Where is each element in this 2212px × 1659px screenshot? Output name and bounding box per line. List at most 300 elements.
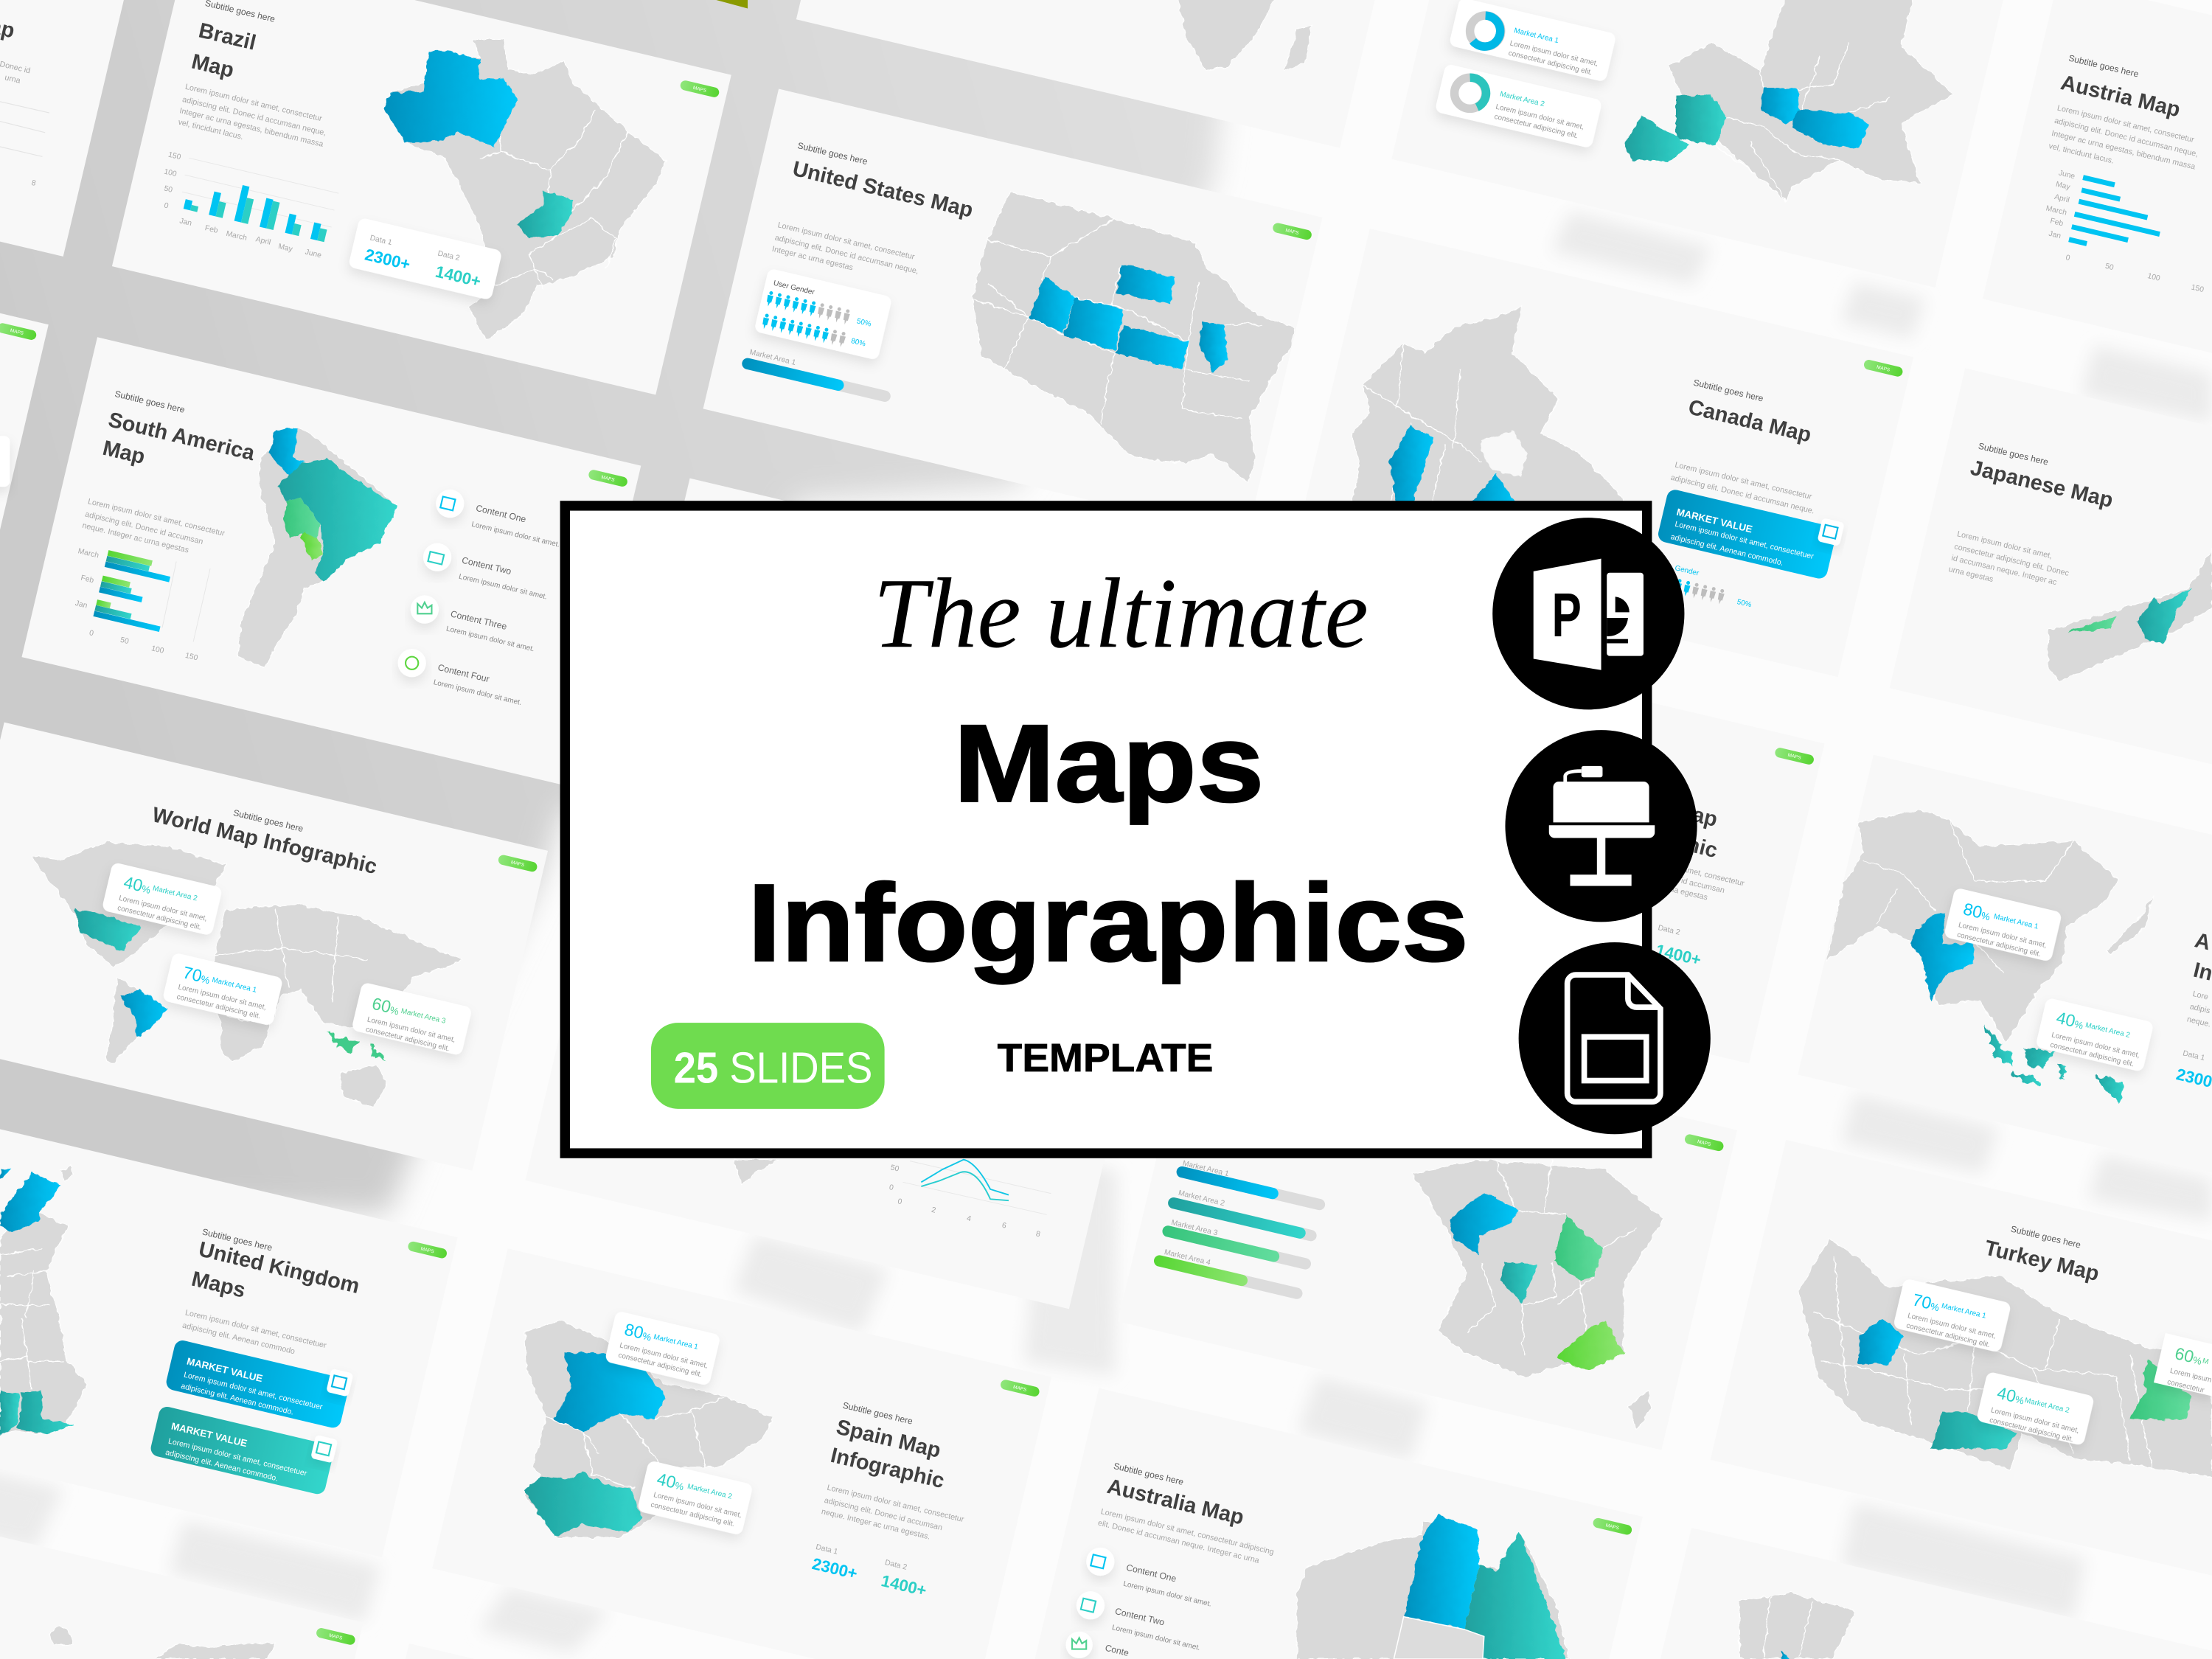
market card one: consectetur adipiscing elit.: [1508, 49, 1593, 77]
body text: adipiscing elit. Donec id accumsan neque,: [2053, 116, 2199, 159]
badge: [1863, 359, 1904, 378]
slide panel: [112, 0, 731, 394]
slide: Canada map: [1294, 229, 1913, 677]
badge: MAPS: [420, 1246, 435, 1255]
body text: Lorem ipsum dolor sit amet, consectetur: [777, 220, 916, 262]
map: Brazil: [383, 40, 666, 340]
subtitle: Subtitle goes here: [1978, 441, 2050, 467]
line chart: 50: [890, 1164, 900, 1174]
region borders: [0, 1248, 63, 1390]
line chart: 4: [966, 1214, 972, 1223]
badge: MAPS: [1876, 365, 1891, 373]
content item three: Lorem ipsum dolor sit amet.: [445, 625, 535, 653]
highlighted province: Alberta: [1390, 426, 1433, 504]
subtitle: Subtitle goes here: [2067, 53, 2140, 80]
body text: [1948, 529, 2070, 587]
title line two: Maps: [189, 1267, 248, 1303]
highlighted: France: [1676, 94, 1727, 145]
data one: Data 1: [815, 1543, 839, 1557]
callout 40%: 40%: [2054, 1008, 2086, 1033]
highlighted: north isles: [0, 1168, 11, 1179]
data card: 1400+: [434, 262, 483, 291]
content item one: [436, 490, 560, 549]
title: Turkey Map: [1982, 1237, 2101, 1286]
country borders: [1716, 42, 1891, 202]
badge: MAPS: [601, 475, 616, 483]
map: Canada: [1352, 306, 1627, 504]
body text: Lorem ipsum dolor sit amet, consectetur: [2056, 103, 2195, 145]
callout 40%: 40%: [122, 872, 153, 897]
body text: elit. Donec id accumsan neque. Integer ac urna: [1097, 1518, 1260, 1565]
content item two: Content Two: [1114, 1606, 1166, 1627]
callout 60%: Lorem ipsum: [2169, 1367, 2212, 1385]
bar chart: May: [277, 243, 294, 254]
slide: Europe map: [1391, 0, 2011, 288]
callout 80%: [605, 1310, 721, 1386]
callout 60%: consectetur: [2166, 1378, 2205, 1395]
content item four: Lorem ipsum dolor sit amet.: [433, 678, 523, 707]
bar chart: [163, 151, 338, 260]
highlighted: Ukraine: [1792, 110, 1869, 148]
callout 40%: Market Area 2: [152, 884, 198, 903]
body text: urna egestas: [1948, 565, 1994, 584]
slide: infographic map fragment: [1206, 615, 1825, 1063]
market card one: [1449, 0, 1616, 83]
highlighted state: Illinois: [1199, 321, 1228, 372]
highlighted state: South Dakota: [1117, 264, 1175, 303]
bar chart: March: [225, 230, 248, 243]
callout 40%: [102, 862, 223, 936]
title: South America: [106, 408, 257, 465]
subtitle: Subtitle goes here: [796, 140, 869, 167]
badge: [316, 1627, 356, 1646]
heading: The ultimate: The ultimate: [873, 558, 1368, 669]
template label: TEMPLATE: [998, 1037, 1213, 1080]
slide panel: [1890, 368, 2212, 765]
callout 60%: [351, 982, 473, 1056]
highlighted state: Utah: [1029, 276, 1075, 333]
map: North America: [32, 842, 226, 967]
horizontal bar chart: [74, 547, 210, 663]
subtitle: Subtitle goes here: [1113, 1461, 1185, 1487]
user gender card: 50%: [856, 317, 872, 329]
icon: PowerPoint: [1492, 518, 1684, 709]
highlighted region: green: [1554, 1214, 1602, 1281]
line chart: 8: [1035, 1230, 1041, 1239]
data label: Data 2: [1657, 924, 1681, 937]
line chart: [888, 1160, 1051, 1239]
bar chart: 150: [167, 151, 182, 161]
region borders: [1764, 1597, 1813, 1658]
body text: Lorem ipsum dolor sit amet, consectetuer: [184, 1308, 327, 1350]
user gender card: [754, 268, 892, 361]
title: Australia Map: [1105, 1475, 1246, 1530]
callout 40%: consectetur adipiscing elit.: [1989, 1416, 2074, 1444]
market value card blue: Lorem ipsum dolor sit amet, consectetuer: [183, 1371, 324, 1412]
callout 80%: Lorem ipsum dolor sit amet,: [619, 1341, 709, 1370]
slide panel: [525, 860, 1144, 1309]
map: Turkey: [1798, 1239, 2212, 1477]
callout 60%: M: [2202, 1357, 2210, 1366]
highlighted state: Kansas: [1114, 326, 1188, 369]
title: Austria Map: [2059, 71, 2183, 122]
callout 60%: [2154, 1333, 2212, 1397]
map: Europe: [1669, 0, 1954, 202]
horizontal bar chart: March: [77, 547, 100, 560]
body text: vel, tincidunt lacus.: [177, 118, 244, 142]
data card: Data 1: [369, 234, 393, 247]
highlighted: Scotland: [0, 1172, 60, 1233]
chart grid: [0, 102, 49, 156]
badge: [588, 469, 628, 487]
highlighted: Queensland: [1464, 1531, 1566, 1659]
title: Brazil: [196, 18, 258, 55]
badge: [0, 322, 38, 341]
slide panel: [1711, 1140, 2212, 1576]
slide panel: [1391, 0, 2011, 288]
slide: hidden centre: [614, 479, 1234, 927]
callout 70%: Lorem ipsum dolor sit amet,: [177, 983, 267, 1012]
body text: neque. Integer ac urna egestas.: [821, 1507, 931, 1542]
highlighted: Northern Territory: [1404, 1515, 1480, 1630]
market value card blue: adipiscing elit. Aenean commodo.: [180, 1382, 294, 1417]
slide panel: [1206, 615, 1825, 1063]
main title card: [565, 506, 1647, 1153]
highlighted state: Amazonas: [383, 51, 518, 147]
bar chart: Jan: [178, 218, 192, 228]
callout 80%: 80%: [1961, 899, 1993, 924]
callout 70%: 70%: [181, 962, 212, 987]
progress bars: Market Area 2: [1178, 1189, 1225, 1208]
subtitle: Subtitle goes here: [201, 1226, 274, 1253]
horizontal bar chart: 0: [88, 629, 94, 638]
partial body text: Lore: [2192, 990, 2209, 1002]
body text: adipiscing elit. Donec id accumsan: [824, 1496, 943, 1532]
map: Japan islands: [2107, 896, 2153, 953]
map: USA: [972, 192, 1295, 482]
content item two: Lorem ipsum dolor sit amet.: [458, 573, 548, 602]
icon: Keynote: [1505, 730, 1697, 922]
market value card teal: Lorem ipsum dolor sit amet, consectetuer: [167, 1437, 308, 1478]
body text: Lorem ipsum dolor sit amet, consectetur: [184, 83, 323, 123]
horizontal bar chart: [2045, 169, 2205, 294]
slide panel: [1118, 1001, 1737, 1450]
grey gutters top left: [0, 0, 1242, 1213]
badge: [1774, 747, 1815, 765]
highlighted: India: [1910, 914, 1974, 1001]
slide panel: [0, 0, 139, 257]
callout 40%: Lorem ipsum dolor sit amet,: [653, 1491, 742, 1520]
highlighted region: blue: [1450, 1192, 1520, 1254]
callout 60%: 60%: [2173, 1343, 2205, 1368]
partial title: Map: [1673, 799, 1719, 832]
badge: [407, 1240, 448, 1259]
data two: 1400+: [880, 1571, 928, 1600]
subtitle: Subtitle goes here: [232, 807, 305, 834]
callout 70%: 70%: [1910, 1290, 1942, 1315]
body text: Lorem ipsum dolor sit amet, consectetur: [1674, 461, 1813, 501]
body text: Lorem ipsum dolor sit amet, consectetur: [826, 1484, 965, 1524]
callout 40%: Lorem ipsum dolor sit amet,: [1990, 1406, 2080, 1435]
market value card teal: adipiscing elit. Aenean commodo.: [164, 1448, 279, 1484]
white card fragment: [0, 436, 10, 487]
data card: Data 2: [437, 250, 461, 262]
gender label: Gender: [1674, 564, 1700, 578]
callout 80%: Market Area 1: [1993, 913, 2039, 931]
heading: Maps: Maps: [953, 702, 1264, 825]
callout 70%: Market Area 1: [1941, 1302, 1987, 1321]
heading: Infographics: Infographics: [748, 861, 1469, 984]
badge: MAPS: [1697, 1139, 1711, 1147]
province borders: [1363, 343, 1495, 504]
highlighted: Indonesia: [327, 1032, 388, 1061]
body text: neque. Integer ac urna egestas: [81, 521, 189, 555]
body text: [821, 1484, 965, 1542]
body text: Lorem ipsum dolor sit amet, consectetur adipiscing: [1100, 1507, 1275, 1557]
bar chart: 0: [163, 201, 170, 211]
callout 40%: consectetur adipiscing elit.: [2049, 1041, 2135, 1068]
slide panel: [0, 1494, 363, 1659]
badge: MAPS: [1787, 753, 1802, 761]
progress bar: [741, 357, 891, 403]
body text: adipiscing elit. Donec id accumsan neque.: [1670, 473, 1815, 515]
data value: 1400+: [1654, 941, 1703, 969]
highlighted region: [1781, 1651, 1792, 1659]
callout 70%: consectetur adipiscing elit.: [175, 993, 261, 1020]
slide: Brazil map: [112, 0, 731, 394]
slide panel: [703, 89, 1322, 538]
market value card teal: MARKET VALUE: [170, 1420, 248, 1449]
highlighted: blue provinces: [1858, 1318, 1903, 1364]
market area label: Market Area 1: [748, 348, 797, 367]
title line two: Infographic: [828, 1444, 947, 1493]
line chart: 0: [897, 1197, 903, 1206]
title: United States Map: [790, 157, 975, 223]
badge: MAPS: [1605, 1523, 1620, 1531]
badge: MAPS: [1285, 228, 1300, 236]
card frame: [565, 506, 1647, 1153]
slide: Africa fragment: [796, 0, 1416, 148]
horizontal bar chart: Jan: [74, 599, 88, 611]
highlighted: south west: [0, 1391, 20, 1436]
progress bars: Market Area 4: [1164, 1248, 1211, 1267]
data card: [348, 218, 503, 300]
callout 40%: Market Area 2: [2024, 1397, 2070, 1415]
map: Madagascar: [1284, 25, 1312, 71]
callout 80%: consectetur adipiscing elit.: [617, 1352, 703, 1379]
callout 70%: [1893, 1278, 2011, 1353]
highlighted: Castile: [554, 1353, 666, 1432]
body text: adipiscing elit. Donec id accumsan neque,: [181, 95, 327, 138]
callout 70%: Market Area 1: [211, 976, 257, 995]
icon: PowerPoint: P: [1552, 580, 1582, 650]
content item three: Content Three: [450, 608, 508, 632]
state borders: [972, 219, 1262, 423]
horizontal bar chart: Jan: [2048, 230, 2062, 240]
slide panel: [0, 723, 548, 1171]
progress bars: Market Area 3: [1170, 1219, 1219, 1237]
content item two: Lorem ipsum dolor sit amet.: [1111, 1624, 1201, 1652]
body text: adipiscing elit. Aenean commodo: [181, 1321, 296, 1356]
content item two: [423, 543, 548, 602]
highlighted region: light green: [1556, 1321, 1624, 1371]
data two: Data 2: [884, 1559, 908, 1572]
bar chart: April: [255, 235, 271, 247]
market value card: [1657, 488, 1845, 580]
highlighted: Poland: [1761, 89, 1800, 124]
highlighted: Paraguay: [301, 532, 323, 560]
country borders: [1863, 820, 2073, 973]
user gender card: User Gender: [773, 279, 815, 297]
slide: Asia map: [1798, 755, 2212, 1172]
subtitle: Subtitle goes here: [1692, 378, 1764, 404]
progress bars: Market Area 1: [1182, 1160, 1230, 1178]
callout 80%: Market Area 1: [653, 1333, 699, 1352]
highlighted state: Colorado: [1064, 298, 1124, 349]
partial body text: adipis: [2189, 1002, 2211, 1015]
horizontal bar chart: June: [2058, 169, 2076, 181]
callout 80%: consectetur adipiscing elit.: [1956, 931, 2042, 959]
callout 80%: Lorem ipsum dolor sit amet,: [1958, 921, 2048, 950]
slide: Turkey map: [1711, 1140, 2212, 1576]
slides count pill: [651, 1023, 885, 1109]
body text: [2048, 103, 2199, 172]
highlighted: Brazil: [120, 989, 168, 1037]
market value card: Lorem ipsum dolor sit amet, consectetuer: [1674, 520, 1815, 561]
bar chart: 100: [163, 168, 178, 178]
people row: [1674, 578, 1725, 605]
body text: Lorem ipsum dolor sit amet, consectetur: [87, 497, 226, 538]
badge: MAPS: [328, 1633, 344, 1641]
highlighted: Indonesia: [1985, 1024, 2124, 1103]
highlighted: Andalusia: [525, 1472, 642, 1537]
slide: Australia map: [1035, 1388, 1643, 1659]
body text: vel, tincidunt lacus.: [2048, 142, 2115, 166]
data card: 2300+: [363, 246, 412, 274]
body text: Integer ac urna egestas, bibendum massa: [178, 106, 324, 149]
content item three: Conte: [1104, 1643, 1130, 1658]
slide: bottom centre: [406, 1644, 475, 1659]
progress bars: [1152, 1160, 1326, 1300]
market value card blue: MARKET VALUE: [186, 1355, 264, 1384]
slide panel: [1294, 229, 1913, 677]
callout 40%: Lorem ipsum dolor sit amet,: [118, 894, 208, 923]
market card one: Market Area 1: [1513, 27, 1559, 45]
title: Spain Map: [834, 1416, 943, 1463]
horizontal bar chart: 100: [150, 644, 165, 655]
map: Australia: [340, 1065, 388, 1107]
partial body text: neque.: [2186, 1015, 2212, 1029]
horizontal bar chart: May: [2055, 181, 2071, 192]
map: South America: [237, 426, 398, 667]
line chart: 6: [1001, 1222, 1007, 1231]
badge: [1000, 1379, 1040, 1397]
data label: Data 1: [2182, 1049, 2206, 1062]
slide panel: [1798, 755, 2212, 1172]
horizontal bar chart: 150: [2191, 283, 2205, 294]
state borders: [480, 85, 627, 289]
map: France: [1412, 1160, 1663, 1377]
body text: adipiscing elit. Donec id accumsan neque,: [774, 233, 919, 276]
callout 70%: consectetur adipiscing elit.: [1905, 1322, 1991, 1349]
callout 60%: 60%: [370, 994, 402, 1018]
slide: left of South America: [0, 196, 49, 644]
slide: line chart: [525, 860, 1144, 1309]
subtitle: Subtitle goes here: [2010, 1224, 2082, 1251]
content item three: [1065, 1632, 1130, 1658]
line chart: 0: [888, 1183, 894, 1192]
region borders: [546, 1397, 726, 1488]
horizontal bar chart: March: [2045, 204, 2067, 218]
callout 60%: consectetur adipiscing elit.: [365, 1026, 451, 1053]
market card one: Lorem ipsum dolor sit amet,: [1509, 39, 1599, 68]
slide panel: [0, 1109, 458, 1557]
slide panel: [0, 196, 49, 644]
slide: Spain map: [432, 1248, 1051, 1659]
map fragment: [734, 1160, 779, 1185]
market value card: MARKET VALUE: [1675, 507, 1753, 535]
gender percent: 50%: [1736, 598, 1753, 609]
partial title line two: Infographic: [1601, 813, 1719, 863]
line chart: 2: [931, 1206, 936, 1215]
horizontal bar chart: 100: [2146, 272, 2161, 283]
map: Spain: [525, 1321, 773, 1537]
slide panel: [1035, 1388, 1643, 1659]
highlighted: green provinces: [2129, 1360, 2191, 1419]
data two: [880, 1559, 928, 1600]
slide panel: [796, 0, 1416, 148]
callout 60%: Market Area 3: [400, 1007, 447, 1026]
body text: id accumsan neque. Integer ac: [1950, 554, 2058, 587]
Hudson Bay: [1480, 431, 1528, 477]
map: Japan: [2048, 550, 2212, 681]
map fragment: island: [49, 1625, 73, 1645]
map: Shetland: [60, 1165, 73, 1182]
market card two: Lorem ipsum dolor sit amet,: [1495, 103, 1585, 131]
slide: United States map: [703, 89, 1322, 538]
bar chart: 50: [163, 185, 173, 195]
content item one: Content One: [1125, 1562, 1178, 1584]
badge: MAPS: [510, 860, 525, 868]
map: UK: [0, 1211, 88, 1435]
province borders: [1813, 1256, 2152, 1467]
content item one: Content One: [475, 503, 527, 525]
slide panel: [1660, 1528, 2212, 1659]
map: Australia: [1296, 1520, 1569, 1659]
callout 40%: [637, 1460, 754, 1536]
slide: France map: [1118, 1001, 1737, 1450]
slide panel: [432, 1248, 1051, 1659]
callout 40%: 40%: [1995, 1383, 2027, 1408]
map: Corsica: [1630, 1391, 1651, 1429]
slide: Austria map: [1983, 0, 2212, 353]
title line two: Map: [100, 437, 147, 469]
body text: [177, 83, 327, 149]
highlighted: Bolivia: [284, 498, 320, 539]
content item two: Content Two: [461, 555, 512, 577]
slide: Japanese map: [1890, 368, 2212, 765]
badge: MAPS: [1012, 1385, 1028, 1393]
slide: South America map: [21, 337, 641, 785]
badge: [498, 854, 538, 873]
partial body text: Lorem ipsum dolor sit amet, consectetur: [1607, 847, 1745, 888]
slide: bottom left: [0, 1494, 363, 1659]
callout 40%: Lorem ipsum dolor sit amet,: [2051, 1031, 2140, 1060]
content item two: [1077, 1591, 1201, 1652]
market card two: Market Area 2: [1499, 90, 1545, 108]
map: Italy region: [1739, 1593, 1855, 1659]
map fragment: mainland: [155, 1644, 275, 1659]
